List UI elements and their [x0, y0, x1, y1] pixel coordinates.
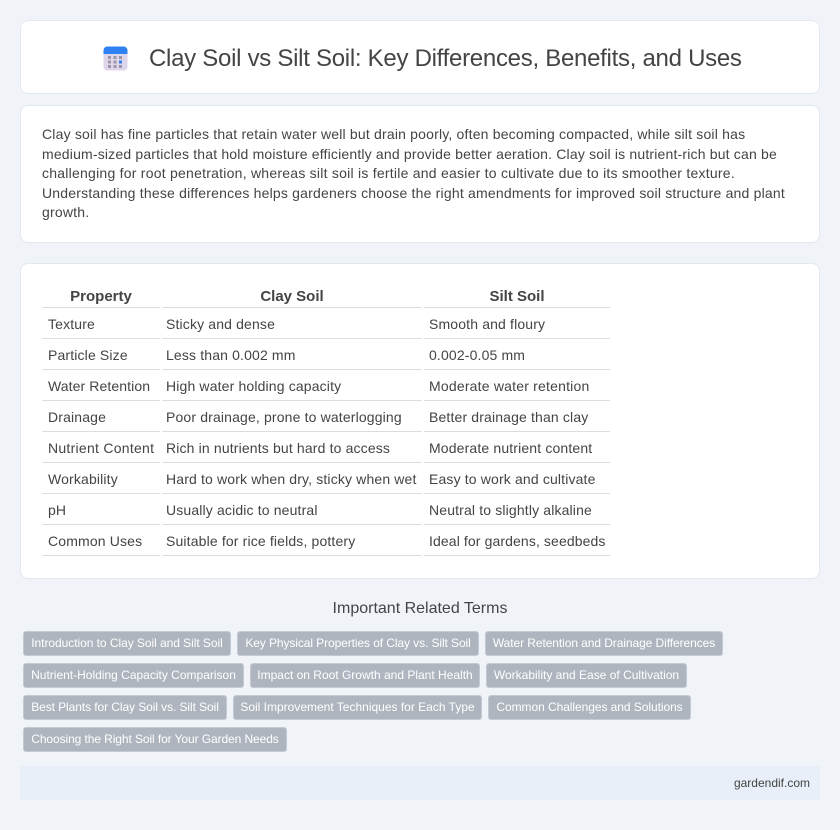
- related terms tags: Choosing the Right Soil for Your Garden Needs: [31, 732, 279, 746]
- related terms tags: Common Challenges and Solutions: [496, 700, 683, 714]
- footer bar: [20, 766, 820, 800]
- comparison table: Sticky and dense: [166, 316, 275, 332]
- related terms tags: Nutrient-Holding Capacity Comparison: [31, 668, 236, 682]
- related terms tags: Best Plants for Clay Soil vs. Silt Soil: [31, 700, 219, 714]
- comparison table: Moderate nutrient content: [429, 440, 592, 456]
- related terms tags: Soil Improvement Techniques for Each Type: [240, 700, 475, 714]
- header panel: [20, 20, 820, 94]
- comparison table: pH: [48, 502, 66, 518]
- intro paragraph: growth.: [42, 204, 89, 220]
- intro paragraph: medium-sized particles that hold moisture efficiently and provide better aeration. Clay soil is nutrient-rich but can be: [42, 146, 777, 162]
- related terms tags: [23, 631, 723, 752]
- comparison table: Drainage: [48, 409, 106, 425]
- comparison table: Moderate water retention: [429, 378, 589, 394]
- comparison table: Rich in nutrients but hard to access: [166, 440, 390, 456]
- title: Clay Soil vs Silt Soil: Key Differences, Benefits, and Uses: [149, 45, 742, 72]
- comparison table: Silt Soil: [489, 288, 544, 305]
- comparison table: 0.002-0.05 mm: [429, 347, 525, 363]
- related terms tags: Key Physical Properties of Clay vs. Silt Soil: [245, 636, 471, 650]
- comparison table: Hard to work when dry, sticky when wet: [166, 471, 417, 487]
- comparison table: Common Uses: [48, 533, 142, 549]
- comparison table: Particle Size: [48, 347, 128, 363]
- intro paragraph: Clay soil has fine particles that retain water well but drain poorly, often becoming compacted, while silt soil has: [42, 126, 745, 142]
- comparison table: Neutral to slightly alkaline: [429, 502, 592, 518]
- comparison table: Property: [70, 288, 132, 305]
- comparison table: Poor drainage, prone to waterlogging: [166, 409, 402, 425]
- related terms tags: Workability and Ease of Cultivation: [494, 668, 679, 682]
- comparison table: Better drainage than clay: [429, 409, 588, 425]
- intro paragraph: [42, 126, 785, 220]
- comparison table panel: [20, 263, 820, 579]
- comparison table: Ideal for gardens, seedbeds: [429, 533, 606, 549]
- comparison table: Clay Soil: [260, 288, 324, 305]
- icon: calendar: [104, 46, 128, 70]
- related terms tags: Introduction to Clay Soil and Silt Soil: [31, 636, 223, 650]
- comparison table: Texture: [48, 316, 95, 332]
- intro paragraph: challenging for root penetration, whereas silt soil is fertile and easier to cultivate due to its smoother texture.: [42, 165, 735, 181]
- footer source: gardendif.com: [734, 776, 810, 790]
- comparison table: High water holding capacity: [166, 378, 341, 394]
- comparison table: [42, 288, 610, 556]
- comparison table: Water Retention: [48, 378, 150, 394]
- comparison table: Easy to work and cultivate: [429, 471, 596, 487]
- comparison table: Suitable for rice fields, pottery: [166, 533, 355, 549]
- intro paragraph: Understanding these differences helps gardeners choose the right amendments for improved soil structure and plant: [42, 185, 785, 201]
- intro text panel: [20, 105, 820, 243]
- comparison table: Workability: [48, 471, 118, 487]
- related terms heading: Important Related Terms: [333, 600, 507, 617]
- comparison table: Nutrient Content: [48, 440, 154, 456]
- comparison table: Usually acidic to neutral: [166, 502, 318, 518]
- related terms tags: Water Retention and Drainage Differences: [493, 636, 715, 650]
- related terms tags: Impact on Root Growth and Plant Health: [257, 668, 473, 682]
- comparison table: Less than 0.002 mm: [166, 347, 296, 363]
- comparison table: Smooth and floury: [429, 316, 545, 332]
